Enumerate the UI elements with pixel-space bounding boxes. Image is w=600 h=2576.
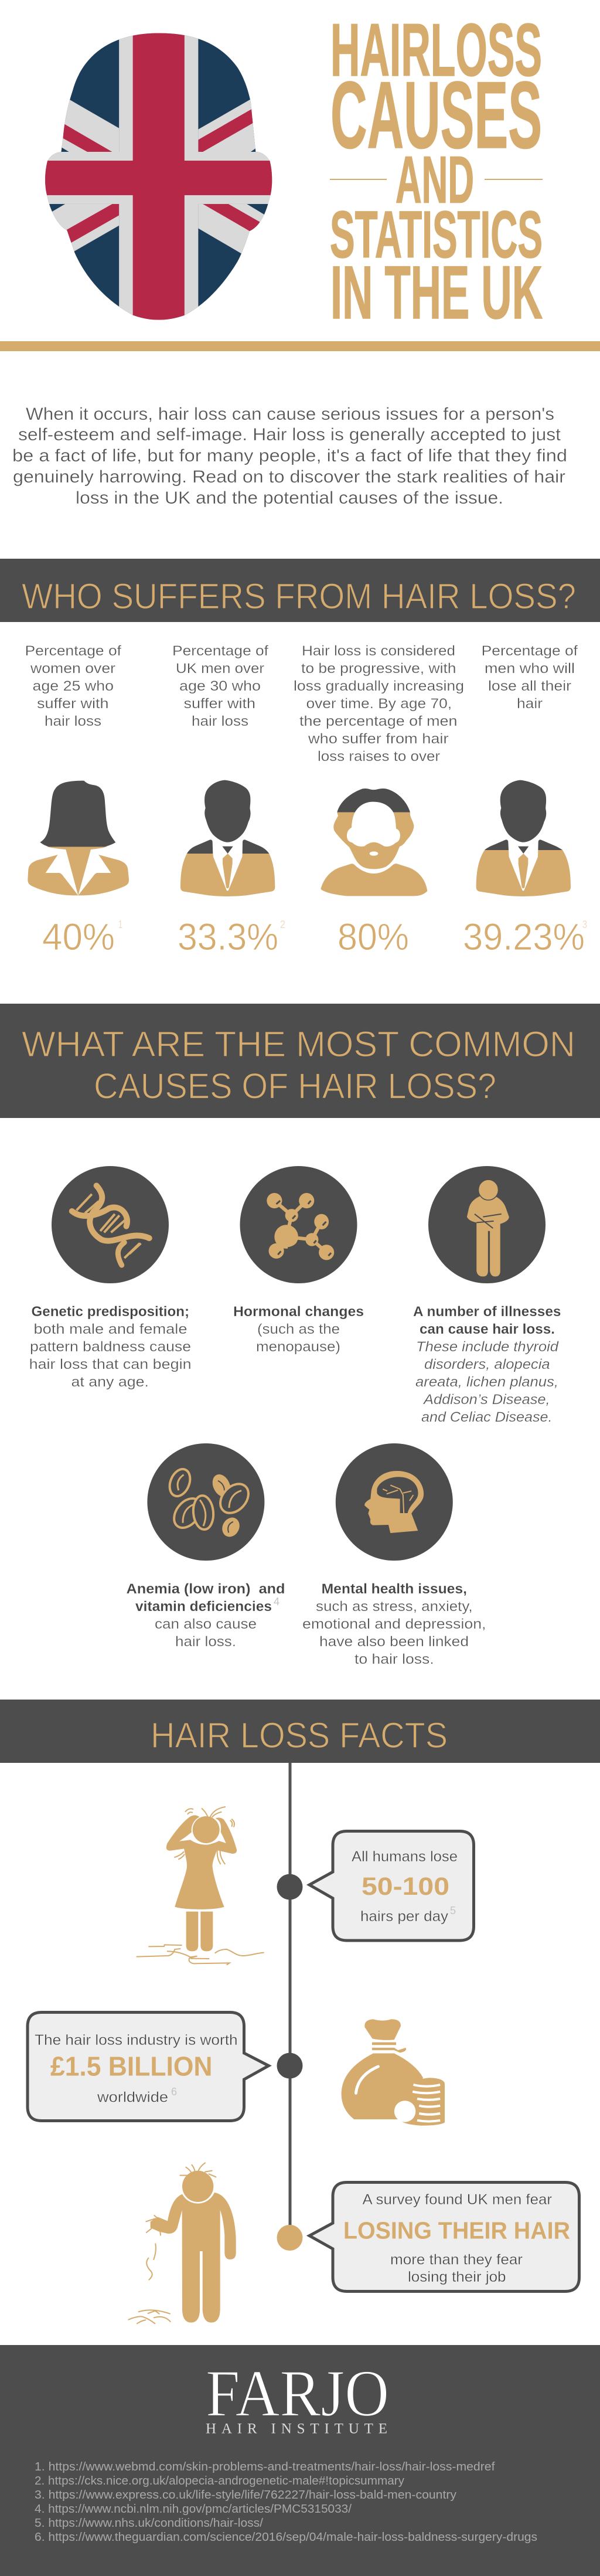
stat: 39.23%: 39.23%	[463, 916, 585, 958]
text: anemia: vitamin deficiencies	[135, 1599, 272, 1615]
text: illnesses: Addison’s Disease,	[422, 1392, 550, 1408]
references list: 6. https://www.theguardian.com/science/2016/sep/04/male-hair-loss-baldness-surgery-drugs	[35, 2531, 537, 2544]
text: progressive hair loss: loss gradually increasing	[294, 678, 464, 694]
callout: 1.5 billion industry: 6	[171, 2086, 177, 2098]
heading band: facts: HAIR LOSS FACTS	[151, 1715, 448, 1755]
icon: bald man bust in suit	[476, 780, 571, 896]
text: genetic predisposition: pattern baldness cause	[30, 1339, 191, 1355]
text: progressive hair loss: Hair loss is considered	[302, 643, 455, 659]
icon: man losing hair	[128, 2163, 236, 2323]
intro text block: When it occurs, hair loss can cause serious issues for a person's	[26, 405, 554, 424]
icon: woman pulling hair	[137, 1807, 264, 1965]
callout: 50-100 hairs per day: All humans lose	[352, 1848, 458, 1865]
heading band: causes: CAUSES OF HAIR LOSS?	[94, 1066, 496, 1106]
timeline node 3	[277, 2225, 302, 2251]
title: AND	[396, 143, 474, 217]
text: mental health: to hair loss.	[354, 1651, 434, 1667]
text: progressive hair loss: the percentage of men	[299, 713, 457, 729]
panel: hair loss facts	[0, 1700, 600, 2323]
text: anemia: can also cause	[155, 1616, 257, 1632]
text: UK men over 30	[172, 643, 268, 729]
callout: fear losing their hair: losing their job	[408, 2269, 506, 2285]
icon: head silhouette with Union Jack flag	[38, 30, 283, 325]
icon: ill person	[428, 1166, 546, 1283]
stat: 39.23%: 3	[582, 919, 587, 930]
logo: Farjo Hair Institute: FARJO	[206, 2357, 389, 2431]
stat: 40%: 40%	[42, 916, 115, 958]
callout: 1.5 billion industry: worldwide	[97, 2089, 168, 2106]
text: hormonal changes: Hormonal changes	[233, 1304, 364, 1320]
stat: 33.3%: 2	[280, 919, 285, 930]
panel: most common causes	[0, 1004, 600, 1667]
icon: DNA	[52, 1166, 169, 1283]
callout: 50-100 hairs per day	[309, 1831, 473, 1941]
callout: fear losing their hair: A survey found UK men fear	[362, 2191, 552, 2208]
icon: man bust in suit	[180, 780, 275, 896]
callout: 1.5 billion industry: The hair loss industry is worth	[35, 2032, 238, 2048]
callout: fear losing their hair	[309, 2182, 579, 2291]
text: genetic predisposition: at any age.	[71, 1374, 149, 1390]
text: mental health: have also been linked	[319, 1634, 469, 1650]
text: anemia	[127, 1581, 285, 1650]
heading band: causes: WHAT ARE THE MOST COMMON	[22, 1024, 575, 1064]
text: men who lose all hair: hair	[517, 696, 543, 712]
text: women over 25: hair loss	[45, 713, 101, 729]
text: UK men over 30: suffer with	[184, 696, 255, 712]
references list: 3. https://www.express.co.uk/life-style/life/762227/hair-loss-bald-men-country	[35, 2489, 456, 2502]
references list	[35, 2461, 537, 2544]
intro text block: self-esteem and self-image. Hair loss is generally accepted to just	[18, 425, 561, 444]
text: men who lose all hair: men who will	[485, 661, 575, 677]
icon: balding bearded man	[321, 789, 427, 896]
title	[330, 8, 543, 335]
icon: hormone molecule	[240, 1166, 357, 1283]
text: progressive hair loss: over time. By age 70,	[306, 696, 452, 712]
heading band: causes	[0, 1004, 600, 1118]
icon: head with brain	[336, 1443, 453, 1561]
icon: blood cells	[147, 1443, 264, 1561]
icon: money bag and coins	[342, 2019, 445, 2126]
text: men who lose all hair: Percentage of	[482, 643, 578, 659]
logo: Farjo Hair Institute: HAIR INSTITUTE	[206, 2421, 387, 2436]
intro text block	[12, 405, 567, 508]
text: UK men over 30: hair loss	[192, 713, 248, 729]
text: hormonal changes: (such as the	[257, 1321, 340, 1337]
text: mental health	[302, 1581, 486, 1667]
text: men who lose all hair	[482, 643, 578, 712]
text: genetic predisposition: hair loss that can begin	[29, 1357, 192, 1372]
intro text block: genuinely harrowing. Read on to discover the stark realities of hair	[13, 467, 565, 487]
heading band: facts	[0, 1700, 600, 1763]
callout: 1.5 billion industry	[28, 2012, 268, 2121]
text: progressive hair loss: loss raises to over	[318, 749, 440, 764]
text: mental health: Mental health issues,	[322, 1581, 467, 1597]
header accent bar	[0, 341, 600, 351]
text: anemia: hair loss.	[175, 1634, 236, 1650]
references list: 1. https://www.webmd.com/skin-problems-and-treatments/hair-loss/hair-loss-medref	[35, 2461, 495, 2473]
text: UK men over 30: age 30 who	[179, 678, 261, 694]
timeline line	[288, 1763, 292, 2238]
text: women over 25: Percentage of	[25, 643, 121, 659]
text: women over 25: age 25 who	[33, 678, 114, 694]
text: progressive hair loss	[294, 643, 464, 764]
text: men who lose all hair: lose all their	[488, 678, 571, 694]
callout: 50-100 hairs per day: hairs per day	[360, 1908, 449, 1925]
text: women over 25: suffer with	[37, 696, 109, 712]
panel: footer	[0, 2345, 600, 2576]
text: women over 25: women over	[30, 661, 115, 677]
stat: 80%: 80%	[338, 916, 409, 958]
callout: fear losing their hair: LOSING THEIR HAIR	[343, 2217, 570, 2244]
text: UK men over 30: UK men over	[176, 661, 264, 677]
callout: 50-100 hairs per day: 5	[450, 1905, 456, 1916]
timeline node 2	[277, 2053, 302, 2079]
text: progressive hair loss: to be progressive, with	[301, 661, 456, 677]
text: mental health: emotional and depression,	[302, 1616, 486, 1632]
text: hormonal changes	[233, 1304, 364, 1355]
stat: 33.3%: 33.3%	[178, 916, 278, 958]
text: illnesses: A number of illnesses	[413, 1304, 561, 1320]
references list: 2. https://cks.nice.org.uk/alopecia-androgenetic-male#!topicsummary	[35, 2475, 404, 2487]
callout: 50-100 hairs per day: 50-100	[362, 1872, 449, 1901]
text: hormonal changes: menopause)	[256, 1339, 340, 1355]
text: genetic predisposition: both male and female	[34, 1321, 188, 1337]
callout: fear losing their hair: more than they fear	[390, 2251, 523, 2268]
panel: who suffers from hair loss	[0, 559, 600, 958]
icon: woman bust	[28, 781, 129, 895]
text: illnesses: These include thyroid	[416, 1339, 559, 1355]
intro text block: be a fact of life, but for many people, it's a fact of life that they find	[12, 446, 567, 465]
stat: 40%: 1	[118, 919, 122, 930]
text: genetic predisposition	[29, 1304, 192, 1390]
text: anemia: Anemia (low iron) and	[127, 1581, 285, 1597]
text: progressive hair loss: who suffer from hair	[308, 731, 449, 747]
text: genetic predisposition: Genetic predisposition;	[32, 1304, 189, 1320]
text: UK men over 30: Percentage of	[172, 643, 268, 659]
text: illnesses	[413, 1304, 561, 1425]
references list: 4. https://www.ncbi.nlm.nih.gov/pmc/articles/PMC5315033/	[35, 2503, 352, 2516]
text: illnesses: disorders, alopecia	[424, 1357, 550, 1372]
intro text block: loss in the UK and the potential causes of the issue.	[76, 488, 503, 508]
references list: 5. https://www.nhs.uk/conditions/hair-loss/	[35, 2517, 263, 2530]
text: illnesses: areata, lichen planus,	[415, 1374, 558, 1390]
text: illnesses: and Celiac Disease.	[421, 1409, 552, 1425]
text: illnesses: can cause hair loss.	[420, 1321, 555, 1337]
heading band: who suffers	[0, 559, 600, 622]
timeline node 1	[277, 1874, 302, 1900]
text: mental health: such as stress, anxiety,	[316, 1599, 473, 1615]
text: anemia: 4	[274, 1596, 279, 1608]
callout: 1.5 billion industry: £1.5 BILLION	[50, 2051, 212, 2082]
text: women over 25	[25, 643, 121, 729]
